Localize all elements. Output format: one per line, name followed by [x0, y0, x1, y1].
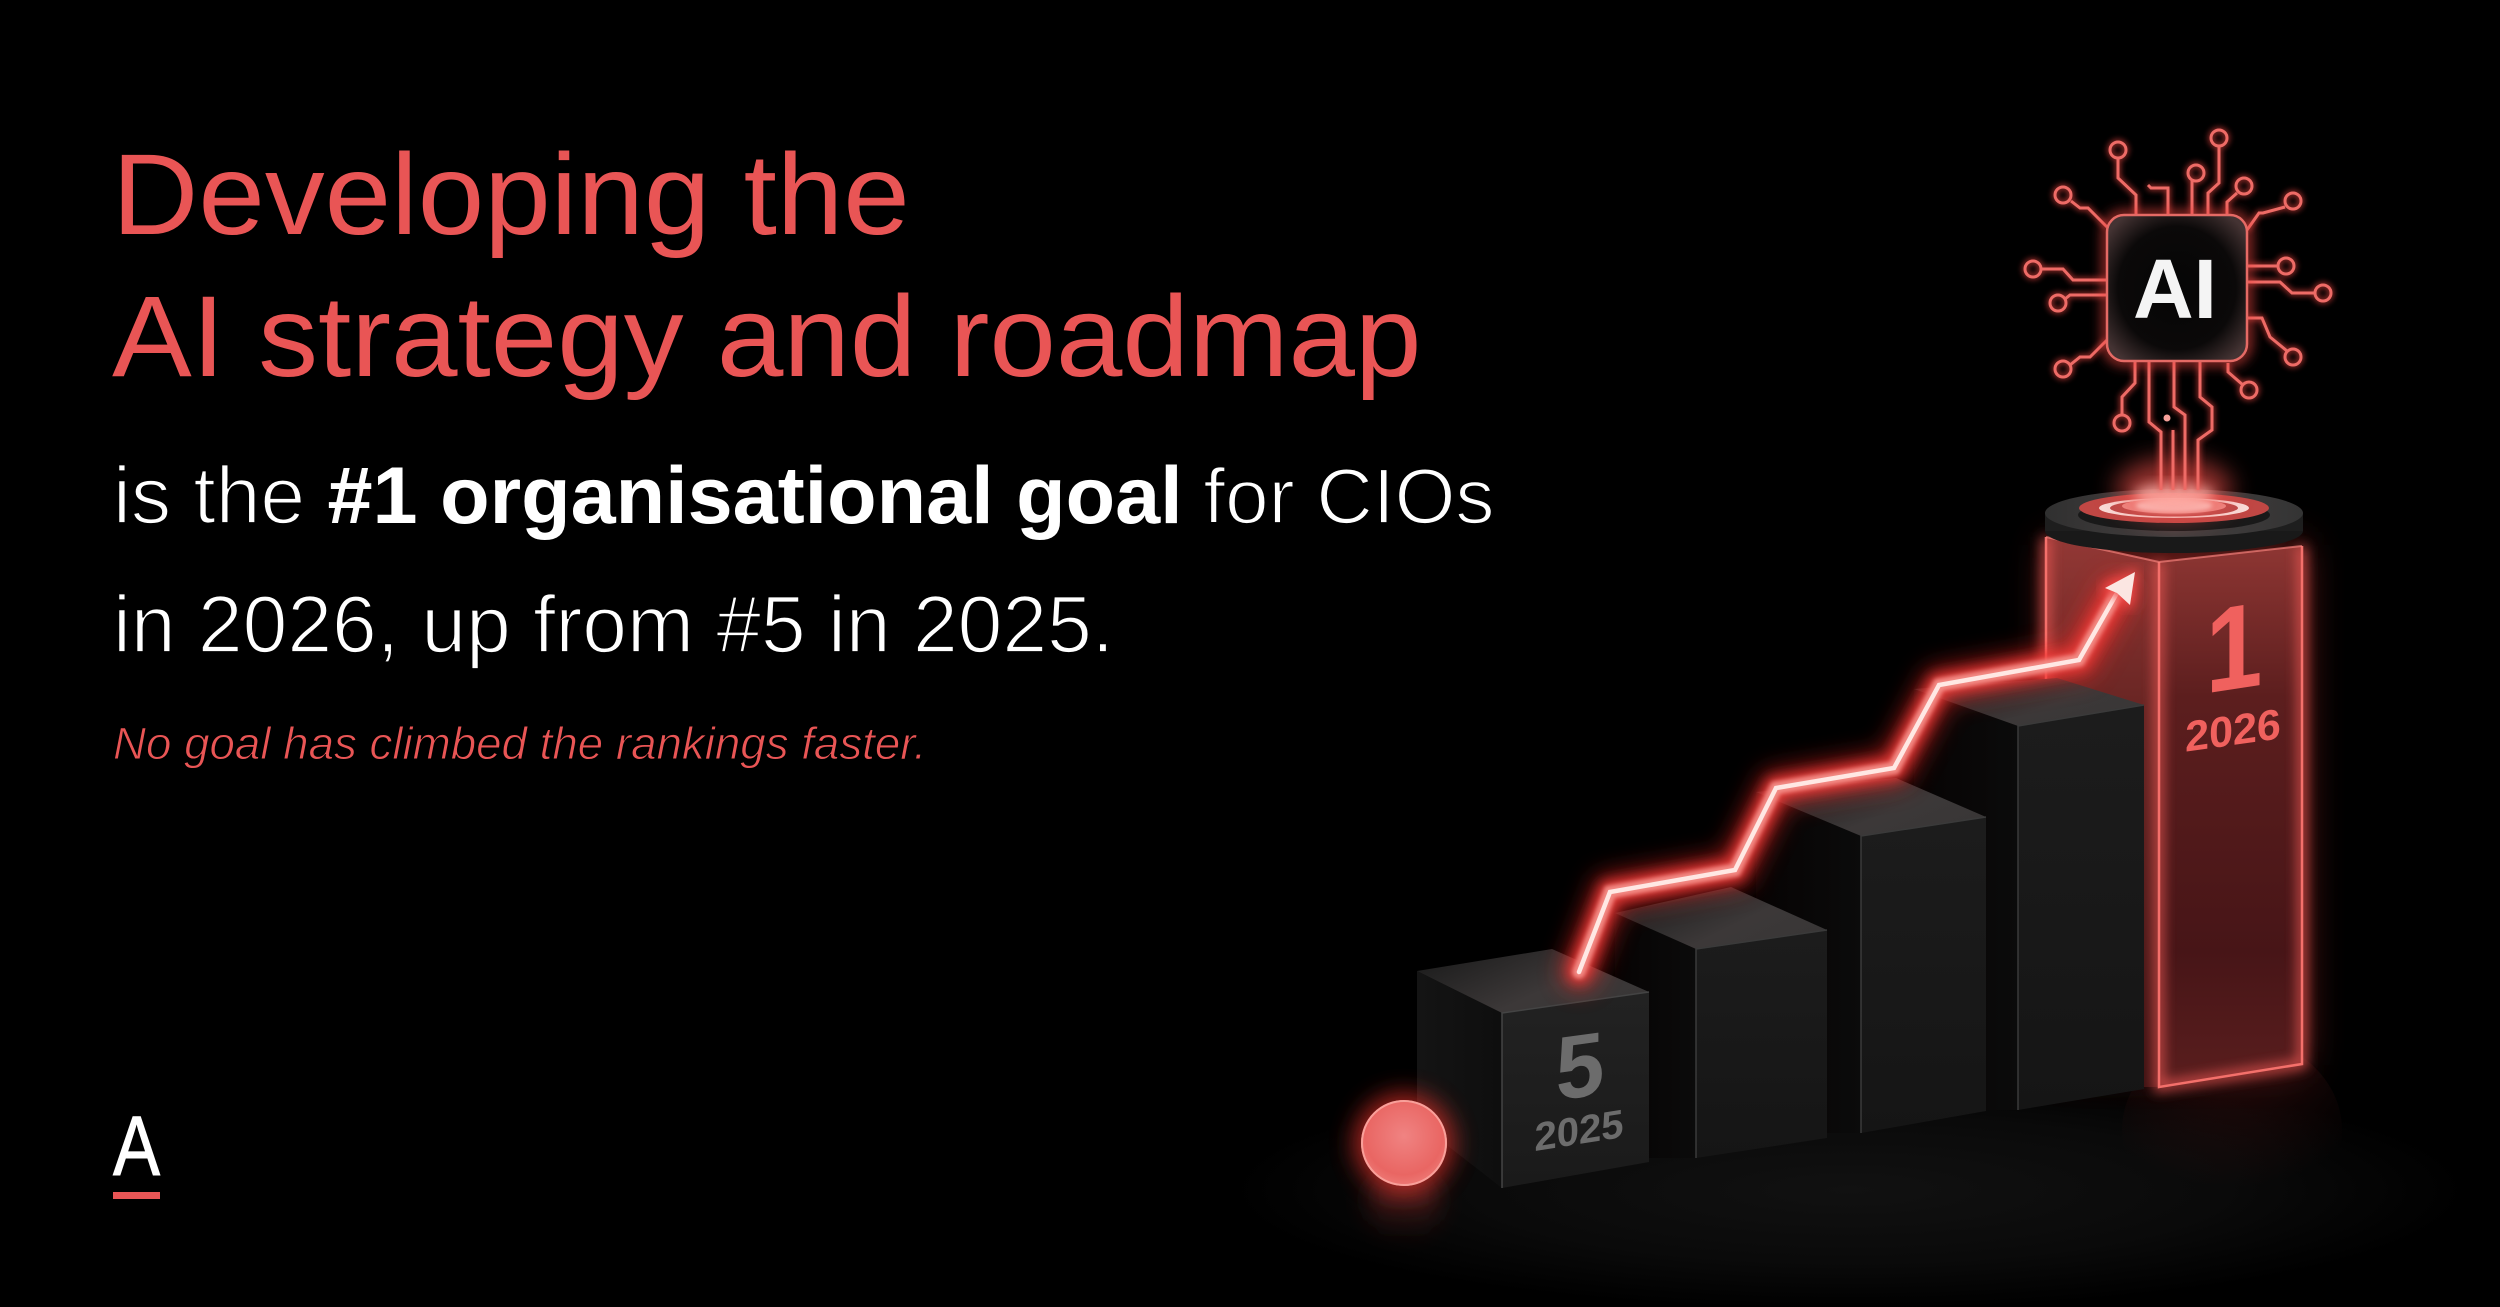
bar: step 2	[1615, 887, 1827, 1158]
logo: Alpha mark: A	[113, 1100, 160, 1193]
circuit traces glow	[2025, 130, 2331, 490]
label: 2025: 2025	[1535, 1101, 1623, 1160]
arrow head	[2105, 572, 2135, 605]
title: developing the AI strategy and roadmap	[112, 130, 1422, 400]
red ring emitter	[2078, 499, 2270, 531]
glowing ball	[1354, 1093, 1454, 1239]
platform disc on top of pillar	[2045, 489, 2303, 553]
circuit traces	[2025, 130, 2331, 490]
tagline: no goal has climbed faster: No goal has climbed the rankings faster.	[113, 718, 926, 769]
bar: rank 5, 2025	[1417, 949, 1649, 1188]
statement: number one organisational goal	[113, 451, 1494, 670]
pillar glow halo	[2050, 545, 2302, 1065]
chip label: AI: AI	[2133, 242, 2217, 336]
bar: step 3	[1756, 778, 1986, 1133]
panel: 3D rising bar chart	[1417, 489, 2342, 1225]
beam glow between chip and platform	[2116, 458, 2232, 518]
label: rank 5: 5	[1556, 1012, 1604, 1119]
label: rank 1: 1	[2206, 576, 2262, 719]
label: 2026: 2026	[2185, 700, 2281, 762]
statement: number one organisational goal: is the #1 organisational goal for CIOs	[113, 451, 1494, 541]
neon growth arrow	[1579, 572, 2135, 972]
chip body	[2107, 215, 2247, 361]
title: developing the AI strategy and roadmap: AI strategy and roadmap	[112, 272, 1422, 400]
bar: rank 1, 2026, glowing red	[2046, 537, 2302, 1087]
floor shading	[1230, 1070, 2470, 1307]
statement: number one organisational goal: in 2026, up from #5 in 2025.	[113, 580, 1114, 670]
bar: step 4	[1914, 678, 2144, 1110]
floor reflection of pillar	[2122, 1035, 2342, 1225]
AI chip with circuit traces	[2025, 130, 2331, 490]
title: developing the AI strategy and roadmap: Developing the	[112, 130, 910, 258]
